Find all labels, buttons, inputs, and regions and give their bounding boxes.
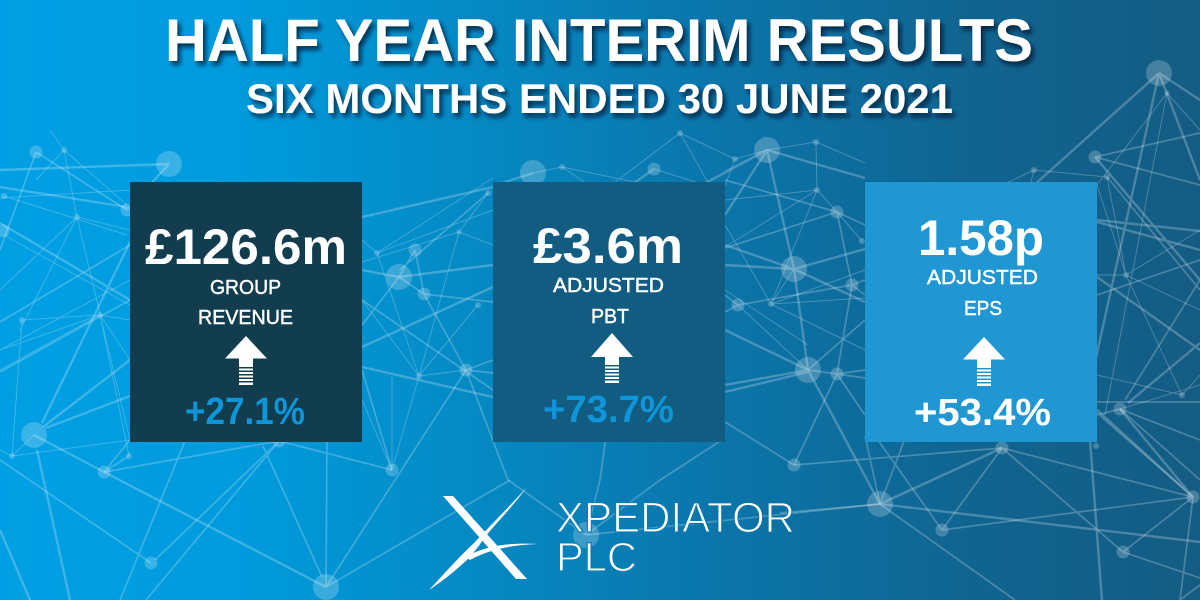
icon: up arrow xyxy=(963,337,1005,386)
PBT value: £3.6m xyxy=(533,218,683,274)
revenue change: +27.1% xyxy=(185,391,305,433)
title: HALF YEAR INTERIM RESULTS xyxy=(165,7,1033,74)
PBT label xyxy=(553,275,664,328)
wordmark: PLC xyxy=(556,534,637,580)
icon: X mark xyxy=(429,488,538,590)
EPS label xyxy=(927,267,1038,320)
revenue label: REVENUE xyxy=(198,307,293,329)
panel: group revenue xyxy=(130,182,362,442)
PBT change: +73.7% xyxy=(543,389,674,431)
panel: adjusted PBT xyxy=(493,182,725,442)
EPS value: 1.58p xyxy=(918,210,1044,266)
EPS label: ADJUSTED xyxy=(927,267,1038,289)
revenue label: GROUP xyxy=(210,277,281,299)
revenue value: £126.6m xyxy=(145,219,347,275)
wordmark: XPEDIATOR xyxy=(556,494,795,542)
icon: up arrow xyxy=(225,336,267,385)
panel: adjusted EPS xyxy=(865,182,1097,442)
wordmark xyxy=(556,494,795,580)
EPS label: EPS xyxy=(964,298,1002,320)
logo: Xpediator PLC xyxy=(429,488,795,590)
PBT label: ADJUSTED xyxy=(553,275,664,297)
icon: up arrow xyxy=(591,333,633,383)
subtitle: SIX MONTHS ENDED 30 JUNE 2021 xyxy=(246,75,953,122)
revenue label xyxy=(198,277,293,329)
EPS change: +53.4% xyxy=(914,392,1051,434)
PBT label: PBT xyxy=(591,306,629,328)
